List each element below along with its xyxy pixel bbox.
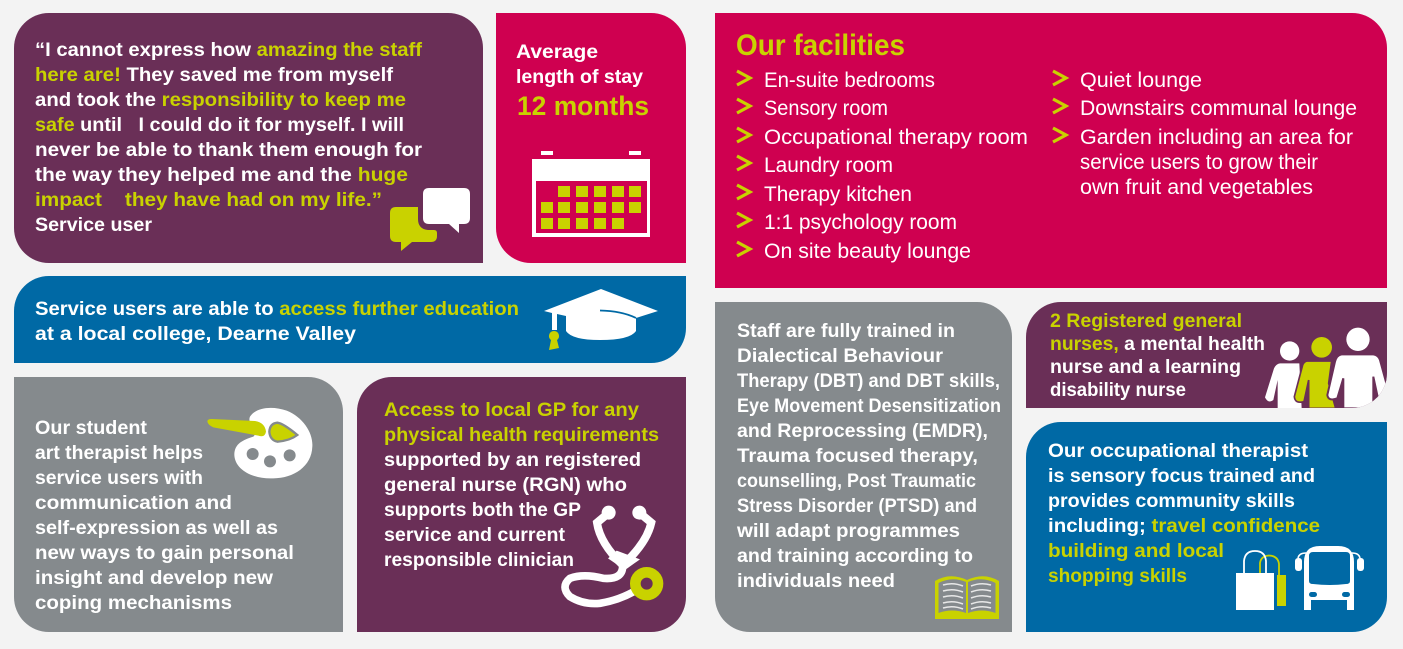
panel: nurses: [1026, 302, 1390, 408]
art therapist text: new ways to gain personal: [35, 542, 294, 564]
icon: bus: [1295, 546, 1364, 610]
icon: three people: [1265, 328, 1390, 408]
icon: calendar: [532, 151, 650, 237]
art therapist text: insight and develop new: [35, 567, 274, 589]
panel: occupational therapist: [1026, 422, 1387, 632]
facilities list: right: Downstairs communal lounge: [1080, 97, 1357, 120]
GP text: general nurse (RGN) who: [384, 474, 627, 496]
staff training text: Staff are fully trained in: [737, 320, 955, 342]
quote text: safe until I could do it for myself. I will: [35, 114, 404, 136]
art therapist text: service users with: [35, 467, 203, 489]
occupational therapist text: [1048, 440, 1320, 587]
quote text: never be able to thank them enough for: [35, 139, 422, 161]
education text: Service users are able to access further education: [35, 298, 519, 320]
art therapist text: self-expression as well as: [35, 517, 278, 539]
panel: art therapist: [14, 377, 343, 632]
GP text: [384, 399, 659, 571]
panel: staff training: [715, 302, 1012, 632]
quote text: the way they helped me and the huge: [35, 164, 408, 186]
nurses text: disability nurse: [1050, 379, 1186, 401]
art therapist text: [35, 417, 294, 614]
nurses text: nurses, a mental health: [1050, 333, 1265, 355]
panel: local GP: [357, 377, 686, 632]
quote text: here are! They saved me from myself: [35, 64, 394, 86]
facilities list: left: Laundry room: [764, 154, 893, 177]
icon: shopping bags: [1236, 551, 1286, 610]
staff training text: counselling, Post Traumatic: [737, 470, 976, 492]
GP text: supports both the GP: [384, 499, 581, 521]
quote text: and took the responsibility to keep me: [35, 89, 406, 111]
facilities list: left: On site beauty lounge: [764, 240, 971, 263]
art therapist text: Our student: [35, 417, 148, 439]
art therapist text: communication and: [35, 492, 232, 514]
length of stay text: [516, 41, 649, 121]
facilities list: left: Therapy kitchen: [764, 183, 912, 206]
occupational therapist text: shopping skills: [1048, 565, 1187, 587]
facilities list: left: 1:1 psychology room: [764, 211, 957, 234]
facilities list: right: own fruit and vegetables: [1080, 176, 1313, 199]
panel: average length of stay: [496, 13, 686, 263]
facilities list: left: Sensory room: [764, 97, 888, 120]
occupational therapist text: including; travel confidence: [1048, 515, 1320, 537]
GP text: physical health requirements: [384, 424, 659, 446]
staff training text: and training according to: [737, 545, 973, 567]
GP text: responsible clinician: [384, 549, 574, 571]
facilities list: left: En-suite bedrooms: [764, 69, 935, 92]
icon: stethoscope: [565, 506, 658, 604]
art therapist text: art therapist helps: [35, 442, 203, 464]
staff training text: Eye Movement Desensitization: [737, 395, 1001, 417]
GP text: service and current: [384, 524, 566, 546]
occupational therapist text: provides community skills: [1048, 490, 1295, 512]
icons: chevrons: [737, 71, 1066, 256]
staff training text: will adapt programmes: [736, 520, 960, 542]
staff training text: Stress Disorder (PTSD) and: [737, 495, 977, 517]
facilities list: right: Quiet lounge: [1080, 69, 1202, 92]
quote text: impact they have had on my life.”: [35, 189, 382, 211]
staff training text: [736, 320, 1001, 592]
icon: speech bubbles: [390, 188, 470, 251]
facilities list: left: Occupational therapy room: [764, 126, 1028, 149]
staff training text: Therapy (DBT) and DBT skills,: [737, 370, 1000, 392]
occupational therapist text: Our occupational therapist: [1048, 440, 1309, 462]
length of stay text: Average: [516, 41, 598, 63]
facilities list: left: [764, 69, 1028, 263]
GP text: supported by an registered: [384, 449, 641, 471]
length of stay text: 12 months: [517, 91, 649, 121]
GP text: Access to local GP for any: [384, 399, 639, 421]
quote text: Service user: [35, 214, 152, 236]
nurses text: nurse and a learning: [1050, 356, 1241, 378]
education text: at a local college, Dearne Valley: [35, 323, 356, 345]
staff training text: Trauma focused therapy,: [737, 445, 978, 467]
panel: further education: [14, 276, 686, 363]
staff training text: and Reprocessing (EMDR),: [737, 420, 988, 442]
occupational therapist text: is sensory focus trained and: [1048, 465, 1315, 487]
quote text: “I cannot express how amazing the staff: [35, 39, 423, 61]
facilities list: right: service users to grow their: [1080, 151, 1318, 174]
panel: our facilities: [715, 13, 1387, 288]
quote text: [35, 39, 423, 236]
staff training text: Dialectical Behaviour: [737, 345, 943, 367]
icon: open book: [935, 576, 999, 619]
facilities list: right: [1080, 69, 1357, 199]
nurses text: [1050, 310, 1265, 401]
art therapist text: coping mechanisms: [35, 592, 232, 614]
education text: [35, 298, 519, 345]
facilities heading: Our facilities: [736, 29, 905, 62]
length of stay text: length of stay: [516, 66, 643, 88]
nurses text: 2 Registered general: [1050, 310, 1242, 332]
staff training text: individuals need: [737, 570, 895, 592]
panel: service user quote: [14, 13, 483, 263]
icon: graduation cap: [544, 289, 658, 350]
occupational therapist text: building and local: [1048, 540, 1224, 562]
icon: paint palette: [207, 408, 312, 478]
facilities list: right: Garden including an area for: [1080, 126, 1353, 149]
